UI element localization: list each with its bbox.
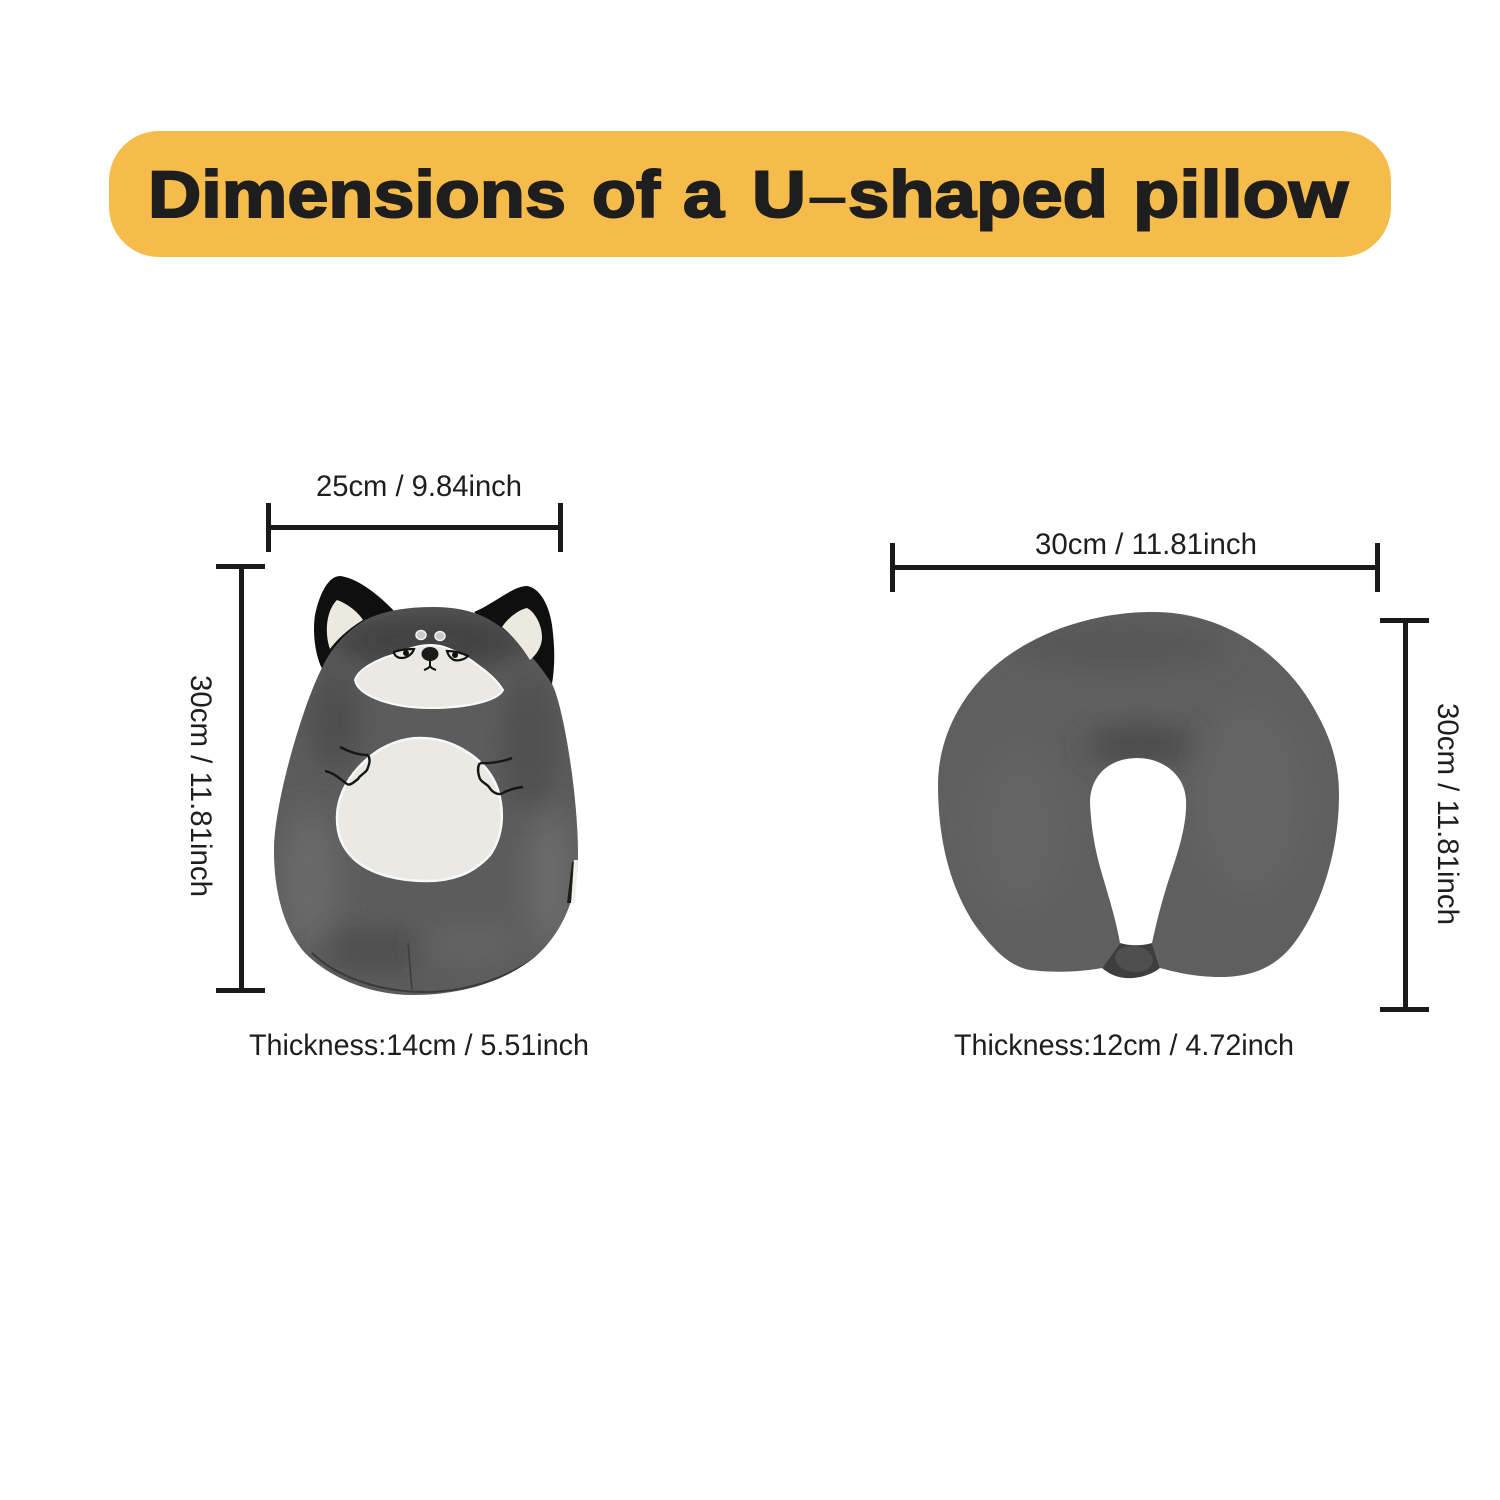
title: a bbox=[683, 157, 725, 231]
width label right: 30cm / 11.81inch bbox=[1035, 528, 1257, 561]
icon: forehead dots bbox=[416, 630, 445, 640]
height label left: 30cm / 11.81inch bbox=[184, 675, 217, 897]
height dimension bracket right bbox=[1380, 618, 1429, 1012]
pillow cushion bbox=[938, 612, 1339, 977]
width dimension bracket left bbox=[266, 503, 563, 552]
side label tag bbox=[567, 860, 578, 904]
title: pillow bbox=[1133, 157, 1349, 231]
height dimension bracket left bbox=[216, 564, 265, 993]
icon: right ear inner bbox=[502, 608, 542, 660]
panel: husky pillow dimensions bbox=[184, 470, 589, 1062]
icon: right ear bbox=[474, 586, 554, 684]
title: of bbox=[592, 157, 661, 231]
title: Dimensions bbox=[148, 157, 566, 231]
icon: nose and mouth bbox=[422, 647, 438, 670]
thickness label right: Thickness:12cm / 4.72inch bbox=[954, 1029, 1294, 1062]
width dimension bracket right bbox=[890, 543, 1380, 592]
title: shaped bbox=[848, 157, 1108, 231]
icon: left paw bbox=[325, 747, 370, 785]
belly patch bbox=[337, 738, 502, 881]
title bbox=[148, 157, 1349, 231]
icon: sleepy eyes bbox=[394, 649, 468, 660]
strap bbox=[1102, 943, 1160, 978]
husky pillow illustration bbox=[274, 576, 578, 995]
title: U bbox=[752, 157, 806, 231]
icon: right paw bbox=[478, 758, 523, 794]
title banner bbox=[109, 131, 1391, 257]
neck pillow illustration bbox=[938, 612, 1339, 978]
icon: left ear bbox=[314, 576, 395, 672]
icon: left ear inner bbox=[327, 600, 363, 649]
pillow body bbox=[274, 607, 578, 995]
title: – bbox=[810, 157, 845, 231]
width label left: 25cm / 9.84inch bbox=[316, 470, 522, 503]
face patch bbox=[355, 645, 503, 708]
thickness label left: Thickness:14cm / 5.51inch bbox=[249, 1029, 589, 1062]
panel: neck pillow dimensions bbox=[890, 528, 1464, 1062]
height label right: 30cm / 11.81inch bbox=[1431, 703, 1464, 925]
